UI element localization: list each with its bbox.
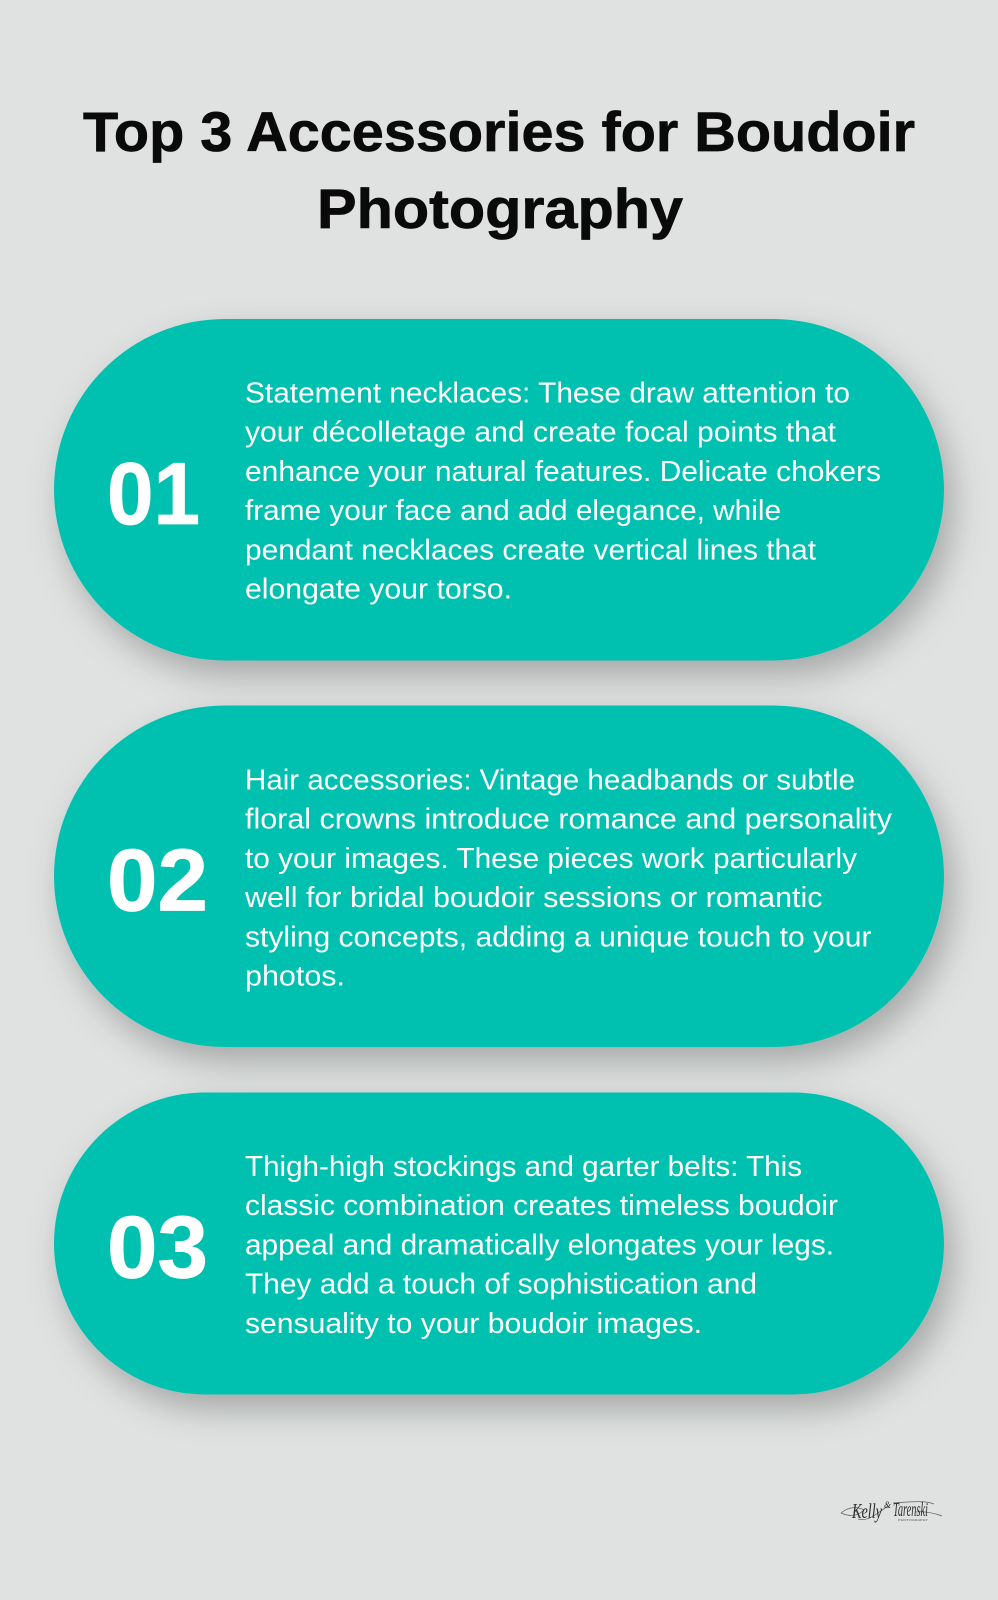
panel: accessory 03 <box>54 1092 944 1394</box>
title <box>83 100 915 240</box>
panel: accessory 01 <box>54 319 944 660</box>
number 01: 01 <box>107 444 200 543</box>
text: hair accessories: styling concepts, adding a unique touch to your <box>245 921 872 953</box>
text: hair accessories: to your images. These pieces work particularly <box>245 843 858 875</box>
number 02: 02 <box>107 830 208 930</box>
pill background 02 <box>54 706 944 1047</box>
text: stockings and garter belts: classic combination creates timeless boudoir <box>245 1190 839 1222</box>
title: Top 3 Accessories for Boudoir <box>83 100 915 163</box>
text: hair accessories: well for bridal boudoir sessions or romantic <box>244 882 823 914</box>
text: hair accessories: Hair accessories: Vintage headbands or subtle <box>245 764 855 796</box>
text: hair accessories: floral crowns introduce romance and personality <box>245 804 893 836</box>
logo: signature: Tarenski <box>893 1499 928 1521</box>
text: statement necklaces: Statement necklaces: These draw attention to <box>245 378 850 410</box>
text: stockings and garter belts: appeal and dramatically elongates your legs. <box>245 1229 834 1261</box>
title: Photography <box>317 177 683 240</box>
text: stockings and garter belts: sensuality to your boudoir images. <box>245 1308 702 1340</box>
text: statement necklaces: pendant necklaces create vertical lines that <box>245 534 816 566</box>
logo: signature: PHOTOGRAPHY <box>898 1518 928 1522</box>
text: statement necklaces <box>245 378 881 606</box>
text: stockings and garter belts: They add a touch of sophistication and <box>245 1269 757 1301</box>
logo: signature: & <box>884 1500 891 1510</box>
pill background 03 <box>54 1092 944 1394</box>
logo: signature: Kelly <box>851 1499 882 1523</box>
text: hair accessories <box>244 764 893 992</box>
logo: signature <box>841 1499 942 1523</box>
text: statement necklaces: your décolletage and create focal points that <box>245 417 836 449</box>
panel: accessory 02 <box>54 706 944 1047</box>
text: stockings and garter belts <box>245 1151 839 1340</box>
text: statement necklaces: frame your face and add elegance, while <box>245 495 781 527</box>
text: statement necklaces: elongate your torso. <box>245 574 512 606</box>
number 03: 03 <box>107 1198 208 1296</box>
text: statement necklaces: enhance your natural features. Delicate chokers <box>245 456 881 488</box>
text: stockings and garter belts: Thigh-high stockings and garter belts: This <box>245 1151 802 1183</box>
pill background 01 <box>54 319 944 660</box>
text: hair accessories: photos. <box>245 960 345 992</box>
